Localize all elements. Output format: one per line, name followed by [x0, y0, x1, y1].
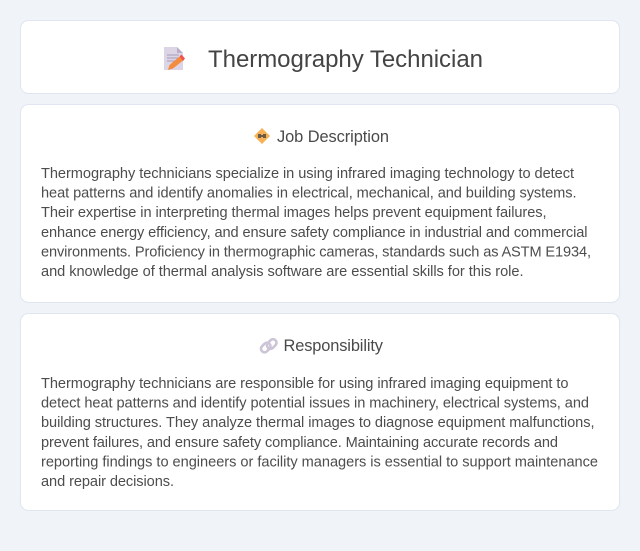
text block: responsibility: detect heat patterns and identify potential issues in machinery, electrical systems, and: [41, 396, 589, 412]
heading: responsibility: Responsibility: [284, 337, 384, 355]
text block: responsibility: prevent failures, and ensure safety compliance. Maintaining accurate records and: [41, 435, 558, 451]
text block: responsibility: building structures. They analyze thermal images to diagnose equipment malfunctions,: [41, 415, 594, 431]
text block: responsibility: [41, 376, 598, 490]
text block: job description: Thermography technicians specialize in using infrared imaging technology to detect: [41, 166, 574, 182]
panel: responsibility: [20, 314, 620, 510]
text block: job description: Their expertise in interpreting thermal images helps prevent equipment failures,: [41, 205, 546, 221]
heading: job description: Job Description: [277, 128, 389, 146]
text block: job description: enhance energy efficiency, and ensure safety compliance in industrial and commercial: [41, 225, 588, 241]
text block: job description: heat patterns and identify anomalies in electrical, mechanical, and building systems.: [41, 186, 576, 202]
text block: job description: [41, 166, 591, 280]
text block: responsibility: reporting findings to engineers or facility managers is essential to support maintenance: [41, 454, 598, 470]
panel: job description: [20, 104, 620, 302]
text block: job description: and knowledge of thermal analysis software are essential skills for this role.: [41, 264, 524, 280]
text block: responsibility: Thermography technicians are responsible for using infrared imaging equipment to: [41, 376, 568, 392]
icon: chain link: [260, 338, 278, 354]
text block: job description: environments. Proficiency in thermographic cameras, standards such as ASTM E1934,: [41, 244, 591, 260]
icon: document with pencil: [164, 47, 185, 70]
title: Thermography Technician: [208, 46, 483, 73]
text block: responsibility: and repair decisions.: [41, 474, 174, 490]
icon: orange diamond: [254, 128, 270, 144]
panel: title card: [20, 20, 620, 94]
